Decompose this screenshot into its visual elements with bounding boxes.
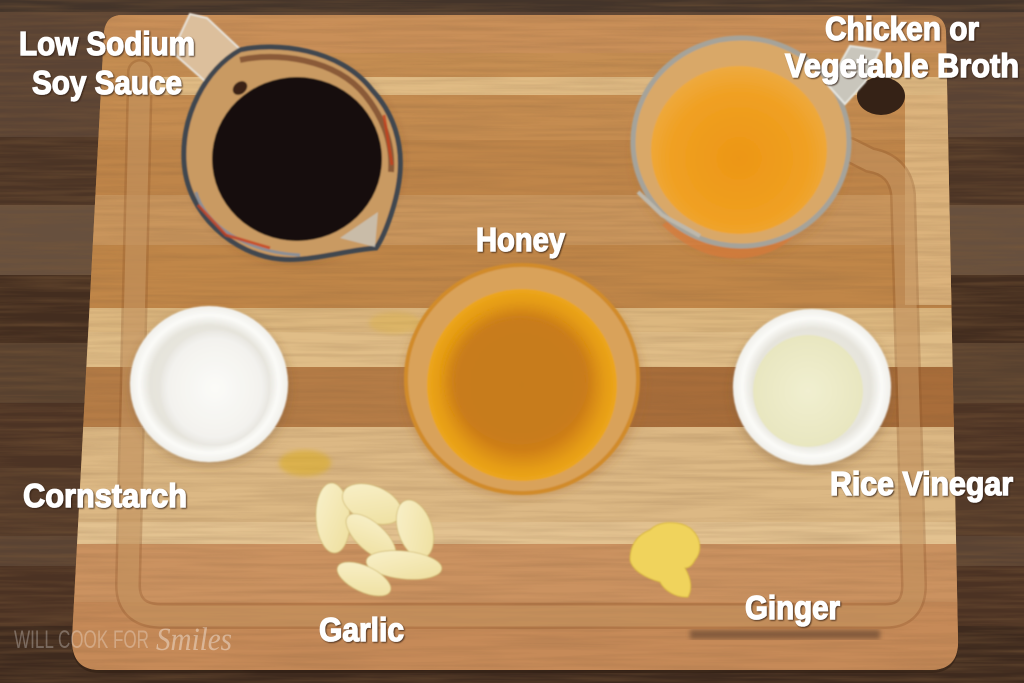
label: cornstarch: Cornstarch xyxy=(23,477,187,514)
label: chicken or vegetable broth xyxy=(785,10,1019,84)
label: chicken or vegetable broth: Chicken or xyxy=(825,10,979,47)
honey stains xyxy=(279,450,331,476)
soy sauce measuring cup xyxy=(172,14,401,262)
broth measuring cup xyxy=(633,38,880,258)
label: garlic: Garlic xyxy=(319,611,404,648)
label: low sodium soy sauce: Soy Sauce xyxy=(32,64,182,101)
juice groove xyxy=(128,72,914,616)
watermark: Smiles xyxy=(156,622,232,658)
ginger xyxy=(630,523,700,597)
honey bowl xyxy=(403,265,643,497)
cornstarch bowl xyxy=(130,306,290,466)
label: honey: Honey xyxy=(476,221,566,258)
label: low sodium soy sauce xyxy=(19,25,195,101)
garlic cloves xyxy=(314,476,443,603)
label: low sodium soy sauce: Low Sodium xyxy=(19,25,195,62)
watermark: WILL COOK FOR xyxy=(14,626,149,654)
label: rice vinegar: Rice Vinegar xyxy=(830,465,1013,502)
label: ginger: Ginger xyxy=(745,589,840,626)
rice vinegar bowl xyxy=(732,309,892,470)
handle hole xyxy=(857,77,905,115)
